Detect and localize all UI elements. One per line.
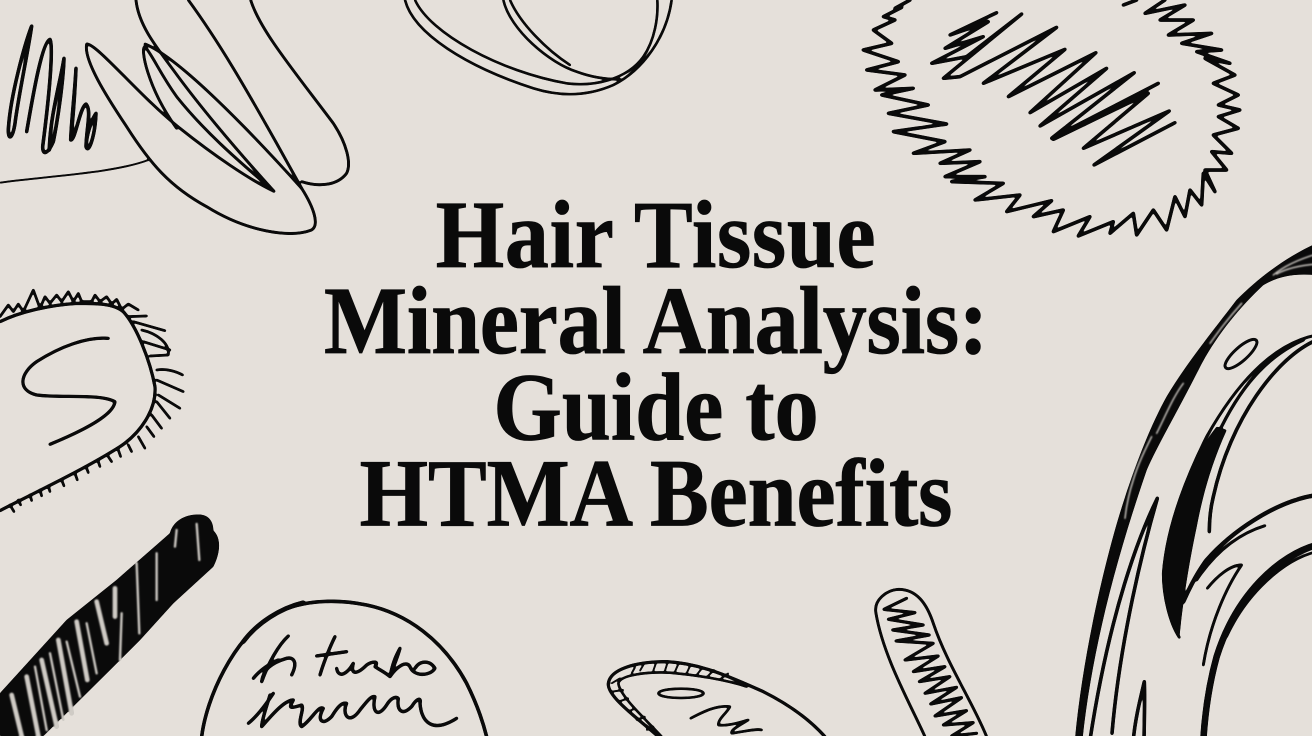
title: Mineral Analysis: <box>324 269 988 375</box>
title <box>324 183 988 547</box>
title: Guide to <box>493 355 819 461</box>
title: Hair Tissue <box>436 183 876 288</box>
scribble: top-centre loops <box>405 0 672 94</box>
pill-shaped scribble <box>876 589 987 736</box>
title: HTMA Benefits <box>360 442 952 547</box>
scribble: handwriting <box>248 636 457 727</box>
large right-hand swooping strokes <box>1075 243 1312 736</box>
brush: bottom-left filled scribble <box>0 515 219 736</box>
oval highlight <box>1221 335 1261 373</box>
scribble: top-right spiky ring <box>863 0 1240 236</box>
scribble: S curve <box>23 338 115 444</box>
scribble: top-left zigzag <box>8 26 96 153</box>
scribble: top-left large loops <box>0 0 349 233</box>
boat-shaped scribble <box>608 662 825 736</box>
arch with handwriting <box>202 601 487 736</box>
inner dark band <box>1164 427 1227 637</box>
outer band <box>1075 243 1312 736</box>
brush: left bristled shape <box>0 290 183 512</box>
scribble: top-right inner zigzag <box>932 13 1175 165</box>
